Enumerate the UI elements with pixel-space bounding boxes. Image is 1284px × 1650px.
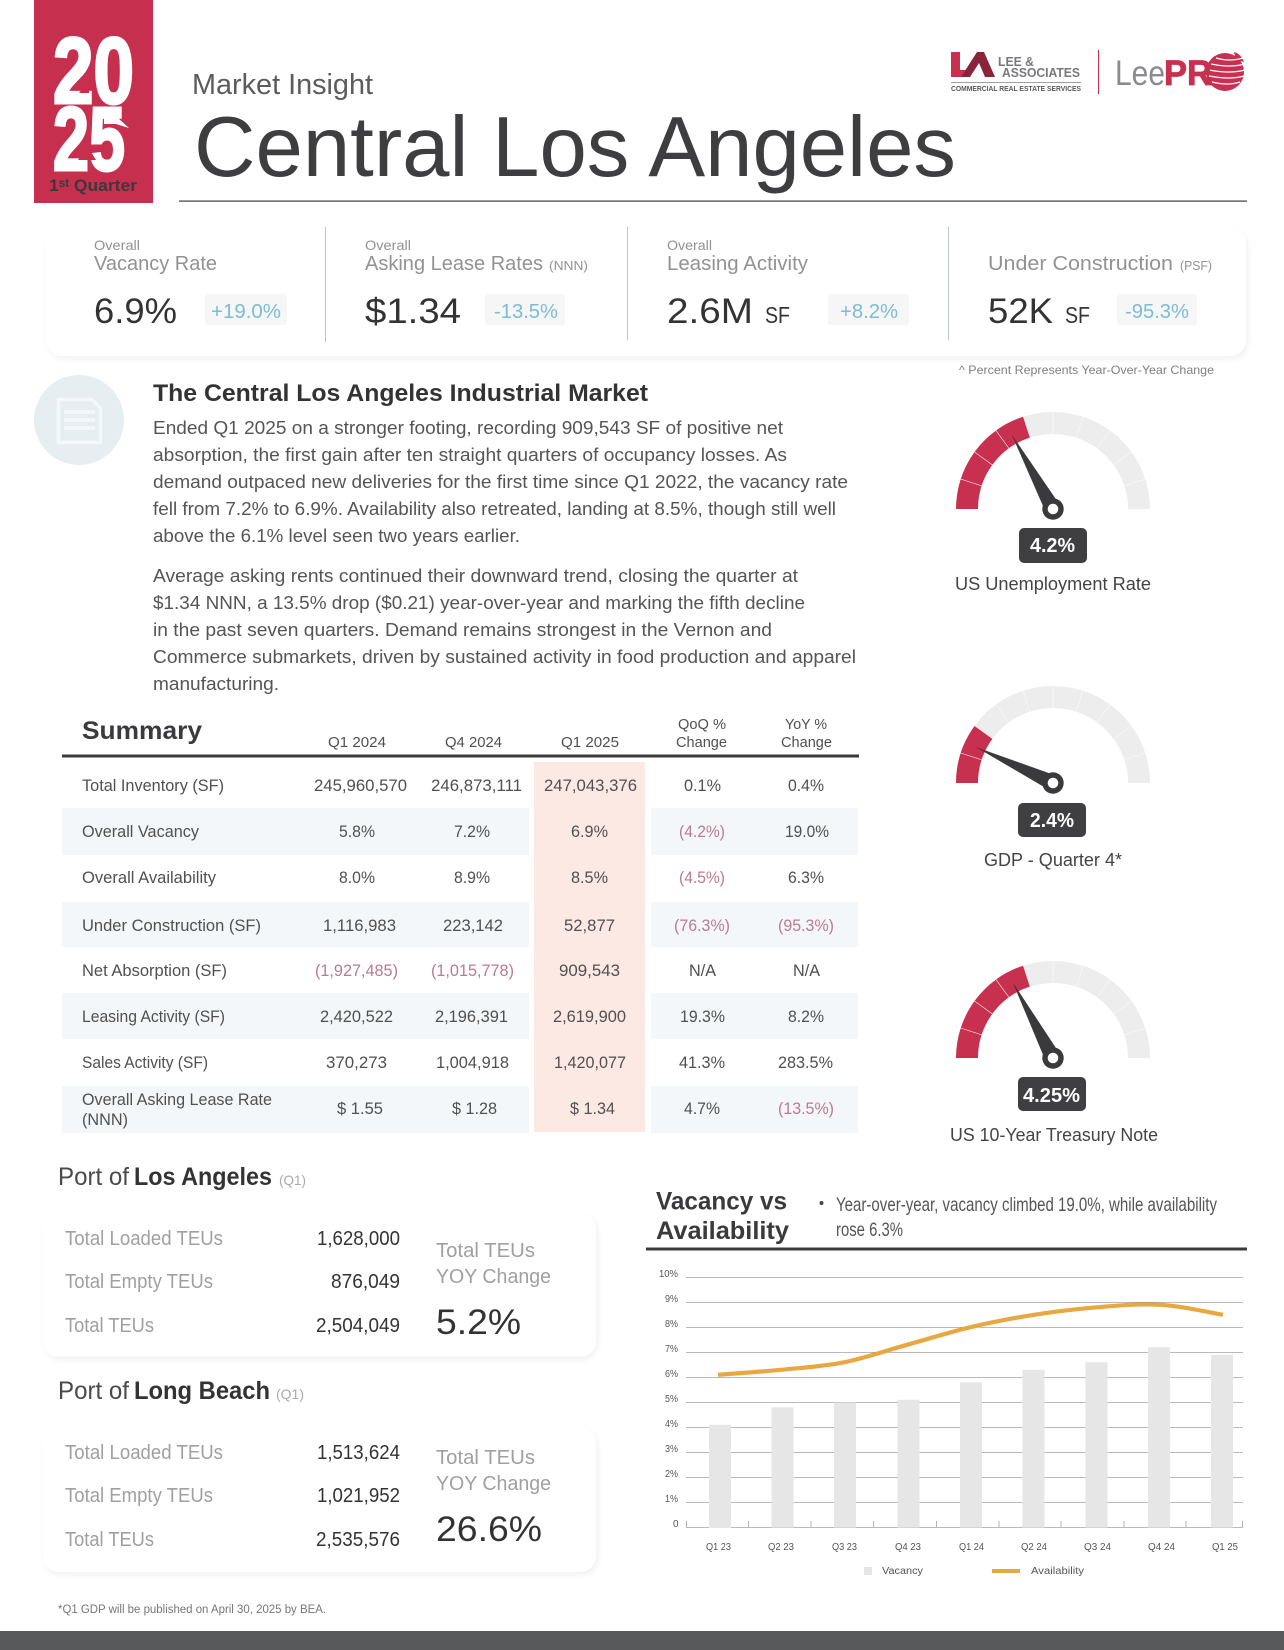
stat: under construction: -95.3% [1125,301,1189,323]
table: summary [62,717,859,1133]
row: overall asking lease rate: (NNN) [82,1111,128,1129]
row: leasing activity: 19.3% [680,1008,725,1026]
table heading: Change [676,735,727,751]
row: overall availability: (4.5%) [679,869,725,887]
row: overall availability: 8.9% [454,869,490,887]
row: overall availability: 6.3% [788,869,824,887]
panel: Port of Long Beach [43,1427,596,1572]
row: total inventory [82,777,824,795]
stat: vacancy rate: 6.9% [94,292,177,331]
row: overall asking lease rate: (13.5%) [778,1100,834,1118]
y-axis labels: 10% [659,1269,678,1280]
panel: Port of Los Angeles: Total TEUs [65,1315,154,1337]
icon: document [34,375,124,465]
table heading: Change [781,735,832,751]
stat: asking lease rates: Asking Lease Rates [365,252,543,275]
panel: Port of Long Beach: 1,513,624 [317,1442,400,1464]
panel: Port of Los Angeles: 2,504,049 [316,1315,400,1337]
row: sales activity [82,1054,833,1072]
x-axis labels: Q2 24 [1021,1542,1047,1553]
x-axis labels: Q3 24 [1084,1542,1111,1553]
text block: paragraph two: Average asking rents continued their downward trend, closing the quarter at [153,565,798,586]
row: overall vacancy: Overall Vacancy [82,823,200,841]
stat: vacancy rate [94,237,287,331]
logo: LeePRO: PR [1164,54,1212,93]
panel: Port of Los Angeles: Total Empty TEUs [65,1271,213,1293]
text block: paragraph two: manufacturing. [153,673,279,694]
y-axis labels: 6% [665,1369,678,1380]
panel: Port of Los Angeles: 1,628,000 [317,1228,400,1250]
row: overall asking lease rate: Overall Asking Lease Rate [82,1091,272,1109]
heading: Port of Los Angeles: (Q1) [279,1172,306,1188]
row: net absorption: Net Absorption (SF) [82,962,227,980]
stat: under construction: (PSF) [1180,258,1212,273]
year badge: 1ˢᵗ Quarter [49,176,137,195]
row: sales activity: 41.3% [679,1054,725,1072]
stat: leasing activity: +8.2% [840,301,898,323]
logo: Lee and Associates [951,52,1081,93]
stat: asking lease rates: -13.5% [494,301,558,323]
stat: vacancy rate: Overall [94,237,140,253]
panel: Port of Long Beach: Total TEUs [436,1447,535,1469]
table heading: Summary [82,717,202,745]
heading: vacancy vs availability: Availability [656,1217,789,1245]
panel: key stats [46,227,1246,356]
text block: paragraph two [153,565,856,694]
heading: Port of Los Angeles [58,1163,306,1191]
text block: paragraph two: $1.34 NNN, a 13.5% drop ($0.21) year-over-year and marking the fifth decline [153,592,805,613]
stat: vacancy rate: Vacancy Rate [94,252,217,275]
text block: paragraph one: demand outpaced new deliveries for the first time since Q1 2022, the vacancy rate [153,471,848,492]
row: total inventory: 246,873,111 [431,777,522,795]
gauge: US 10-year treasury note [950,961,1158,1145]
text block: paragraph one: Ended Q1 2025 on a stronger footing, recording 909,543 SF of positive net [153,417,783,438]
y-axis labels: 4% [665,1419,678,1430]
row: overall availability: 8.5% [571,869,608,887]
text block: paragraph two: Commerce submarkets, driven by sustained activity in food production and apparel [153,646,856,667]
table heading: YoY % [785,717,827,733]
legend [864,1566,1084,1577]
row: overall availability: 8.0% [339,869,375,887]
x-axis labels [706,1542,1238,1553]
row: overall asking lease rate: 4.7% [684,1100,720,1118]
gauge value: 2.4% [1030,810,1074,832]
stat: asking lease rates [365,237,588,331]
row: leasing activity: 2,619,900 [553,1008,626,1026]
row: overall vacancy: (4.2%) [679,823,725,841]
heading: Port of Long Beach: Long Beach [134,1377,270,1405]
row: total inventory: 0.4% [788,777,824,795]
text block: paragraph one: above the 6.1% level seen two years earlier. [153,525,520,546]
heading: vacancy vs availability: Vacancy vs [656,1188,787,1216]
row: overall asking lease rate: $ 1.55 [337,1100,383,1118]
panel: Port of Los Angeles: Total Loaded TEUs [65,1228,223,1250]
chart: vacancy vs availability [659,1269,1243,1577]
heading: Port of Long Beach: (Q1) [276,1386,304,1402]
heading: market overview: The Central Los Angeles Industrial Market [153,380,648,407]
heading: Port of Los Angeles: Port of [58,1163,129,1191]
row: total inventory: 247,043,376 [544,777,637,795]
row: net absorption [82,962,820,980]
row: net absorption: (1,927,485) [315,962,398,980]
table heading: Q4 2024 [445,735,502,751]
stat: asking lease rates: $1.34 [365,292,461,331]
table heading [62,717,859,758]
gauge: GDP: GDP - Quarter 4* [984,849,1122,870]
logo divider [1098,50,1099,94]
gauge value [1018,803,1086,837]
table backgrounds [62,762,858,1133]
row: total inventory: Total Inventory (SF) [82,777,224,795]
row: under construction: 223,142 [443,917,503,935]
legend: Vacancy [882,1566,923,1577]
heading: Port of Long Beach: Port of [58,1377,129,1405]
x-axis labels: Q1 24 [959,1542,984,1553]
logo: LeePRO: Lee [1115,54,1165,93]
stat: asking lease rates: (NNN) [549,258,588,273]
stat: under construction: 52K [988,292,1053,331]
panel: Port of Los Angeles: 5.2% [436,1303,521,1342]
row: under construction: (76.3%) [674,917,730,935]
stat: asking lease rates: Overall [365,237,411,253]
y-axis labels: 1% [665,1494,678,1505]
row: overall vacancy: 6.9% [571,823,608,841]
row: net absorption: N/A [689,962,716,980]
panel: Port of Los Angeles: 876,049 [331,1271,400,1293]
row: overall availability: Overall Availability [82,869,217,887]
row: leasing activity: 2,196,391 [435,1008,508,1026]
gauge: US 10-year treasury note: US 10-Year Treasury Note [950,1124,1158,1145]
row: overall asking lease rate: $ 1.28 [452,1100,497,1118]
row: leasing activity: 2,420,522 [320,1008,393,1026]
y-axis labels: 9% [665,1294,678,1305]
row: under construction: Under Construction (SF) [82,917,261,935]
y-axis labels [659,1269,679,1530]
vacancy bars [709,1347,1233,1528]
stat: leasing activity: 2.6M [667,292,753,331]
row: leasing activity: 8.2% [788,1008,824,1026]
gauge: US unemployment rate [955,412,1151,594]
row: under construction: 52,877 [564,917,615,935]
logo: Lee and Associates: LEE & [998,55,1034,69]
gauge: GDP [961,686,1145,870]
chart gridlines and axis [686,1277,1243,1527]
gauge value: 4.2% [1030,535,1075,557]
panel: Port of Long Beach: 2,535,576 [316,1529,400,1551]
panel: Port of Long Beach: 26.6% [436,1510,542,1549]
gauge value [1018,1077,1086,1111]
y-axis labels: 8% [665,1319,678,1330]
row: overall asking lease rate [82,1091,834,1129]
stat: leasing activity [667,237,909,331]
x-axis labels: Q1 25 [1212,1542,1238,1553]
panel: Port of Long Beach: 1,021,952 [317,1485,400,1507]
row: under construction: (95.3%) [778,917,834,935]
x-axis labels: Q2 23 [768,1542,794,1553]
stat: under construction [988,252,1212,331]
stat: leasing activity: Overall [667,237,712,253]
row: sales activity: Sales Activity (SF) [82,1054,208,1072]
text block: paragraph one: absorption, the first gain after ten straight quarters of occupancy losses. As [153,444,787,465]
note: percent represents year-over-year change: ^ Percent Represents Year-Over-Year Change [959,363,1214,377]
gauge value [1019,528,1087,563]
row: overall vacancy: 5.8% [339,823,375,841]
year badge [34,0,153,203]
x-axis labels: Q3 23 [832,1542,857,1553]
x-axis labels: Q4 23 [895,1542,921,1553]
stat: under construction: SF [1065,302,1090,328]
y-axis labels: 7% [665,1344,678,1355]
heading: vacancy vs availability [646,1188,1247,1250]
y-axis labels: 0 [673,1519,679,1530]
y-axis labels: 5% [665,1394,678,1405]
title [179,69,1247,202]
y-axis labels: 3% [665,1444,678,1455]
logo: LeePRO [1115,52,1245,93]
text block: paragraph one [153,417,848,546]
gauge dial [961,686,1145,794]
row: total inventory: 0.1% [684,777,721,795]
gauge: US unemployment rate: US Unemployment Rate [955,573,1151,594]
row: sales activity: 283.5% [778,1054,833,1072]
row: under construction [82,917,834,935]
panel: Port of Long Beach: Total Loaded TEUs [65,1442,223,1464]
row: overall vacancy: 7.2% [454,823,490,841]
row: leasing activity [82,1008,824,1026]
table heading: Q1 2024 [328,735,386,751]
logo: Lee and Associates: ASSOCIATES [1002,66,1080,80]
title: Central Los Angeles [194,100,956,195]
gauge dial [961,412,1145,520]
footnote: *Q1 GDP will be published on April 30, 2025 by BEA. [58,1604,326,1616]
row: sales activity: 1,420,077 [554,1054,626,1072]
heading: Port of Los Angeles: Los Angeles [134,1163,272,1191]
panel: Port of Los Angeles: Total TEUs [436,1240,535,1262]
panel: Port of Los Angeles [43,1213,596,1357]
row: sales activity: 1,004,918 [436,1054,509,1072]
gauge value: 4.25% [1023,1085,1080,1107]
stat: leasing activity: SF [765,302,790,328]
x-axis labels: Q1 23 [706,1542,731,1553]
availability line [718,1304,1223,1375]
year badge: 25 [53,90,125,190]
panel: Port of Long Beach: Total Empty TEUs [65,1485,213,1507]
x-axis labels: Q4 24 [1148,1542,1175,1553]
y-axis labels: 2% [665,1469,678,1480]
row: under construction: 1,116,983 [323,917,396,935]
row: sales activity: 370,273 [326,1054,387,1072]
table heading: QoQ % [678,717,726,733]
table heading: Q1 2025 [561,735,619,751]
row: net absorption: (1,015,778) [431,962,514,980]
stat: under construction: Under Construction [988,252,1173,275]
year badge: 20 [53,18,134,123]
heading: Port of Long Beach [58,1377,304,1405]
logo: Lee and Associates: COMMERCIAL REAL ESTATE SERVICES [951,86,1081,93]
row: overall availability [82,869,824,887]
row: overall asking lease rate: $ 1.34 [570,1100,615,1118]
title: Market Insight [192,69,373,101]
row: total inventory: 245,960,570 [314,777,407,795]
panel: Port of Los Angeles: YOY Change [436,1266,551,1288]
row: overall vacancy: 19.0% [785,823,829,841]
panel: Port of Long Beach: Total TEUs [65,1529,154,1551]
panel: Port of Long Beach: YOY Change [436,1473,551,1495]
footer bar [0,1631,1284,1650]
gauge dial [961,961,1145,1069]
text block: paragraph one: fell from 7.2% to 6.9%. Availability also retreated, landing at 8.5%, though still well [153,498,836,519]
stat: leasing activity: Leasing Activity [667,252,809,275]
row: overall vacancy [82,823,829,841]
row: leasing activity: Leasing Activity (SF) [82,1008,225,1026]
row: net absorption: N/A [793,962,820,980]
text block: paragraph two: in the past seven quarters. Demand remains strongest in the Vernon and [153,619,772,640]
stat: vacancy rate: +19.0% [211,301,281,323]
row: net absorption: 909,543 [559,962,620,980]
legend: Availability [1031,1566,1084,1577]
callout: chart summary: rose 6.3% [836,1219,903,1241]
callout: chart summary [820,1194,1217,1241]
